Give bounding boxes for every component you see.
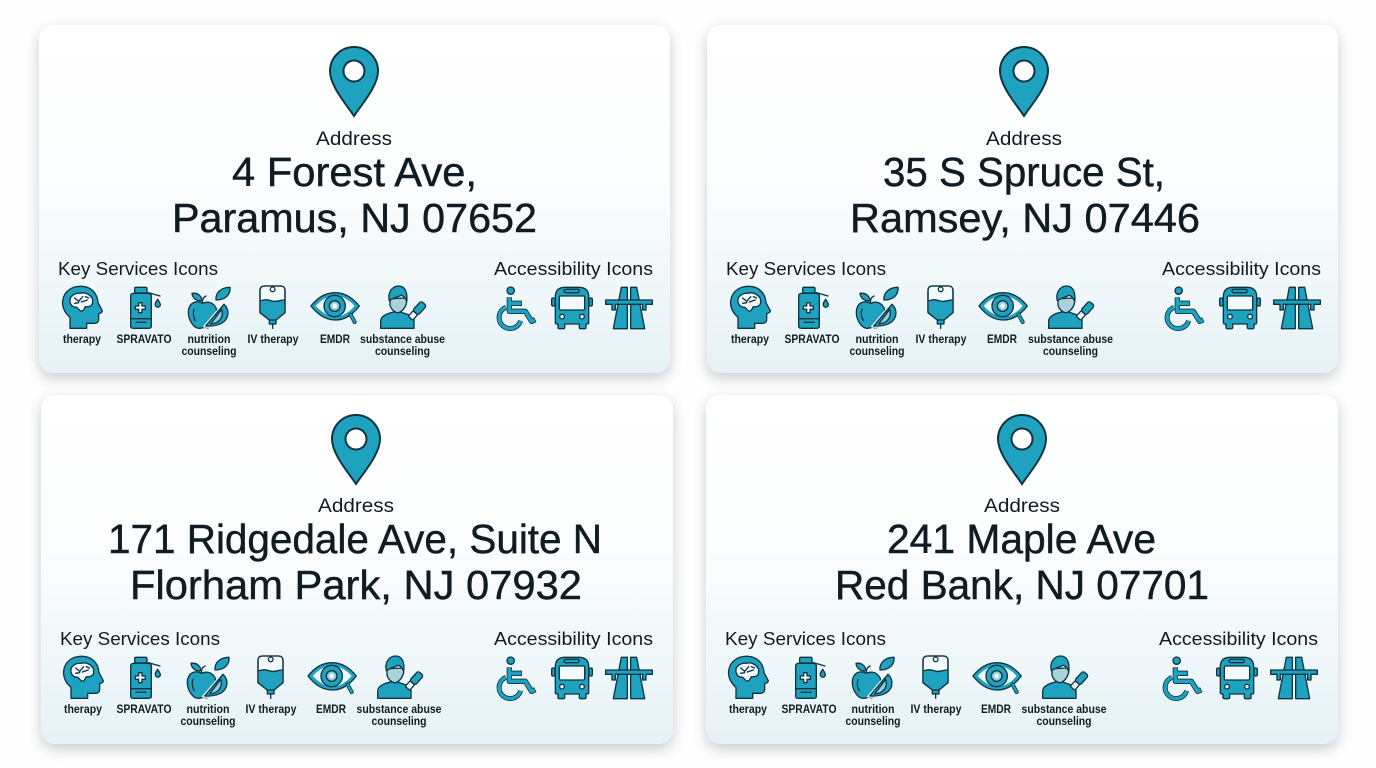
icon: location pin <box>1000 47 1048 116</box>
label: address: Address <box>984 496 1060 517</box>
service: SPRAVATO <box>116 657 172 716</box>
heading: address: 4 Forest Ave, <box>232 149 477 195</box>
service: therapy <box>731 286 770 346</box>
service: substance abuse counseling: counseling <box>1043 344 1098 358</box>
heading: key services: Key Services Icons <box>60 628 220 649</box>
service: SPRAVATO: SPRAVATO <box>116 702 172 716</box>
service: nutrition counseling: nutrition <box>186 702 230 716</box>
service: therapy: therapy <box>729 702 767 716</box>
icon: highway <box>1274 287 1320 329</box>
service: nutrition counseling: nutrition <box>188 332 230 346</box>
panel: Florham Park location <box>41 395 673 744</box>
service: nutrition counseling <box>182 287 236 358</box>
service: nutrition counseling <box>846 657 900 728</box>
icon: wheelchair <box>1165 657 1201 699</box>
icon: location pin <box>332 415 380 484</box>
service: IV therapy <box>910 656 962 716</box>
icon: highway <box>606 287 652 329</box>
service: IV therapy: IV therapy <box>916 332 967 346</box>
service: therapy: therapy <box>63 332 101 346</box>
service: EMDR <box>979 293 1027 346</box>
service: substance abuse counseling: counseling <box>375 344 430 358</box>
service: EMDR: EMDR <box>981 702 1011 716</box>
service: SPRAVATO <box>116 287 172 346</box>
service: substance abuse counseling: substance abuse <box>356 702 442 716</box>
icon: highway <box>606 657 652 699</box>
service: nutrition counseling <box>850 287 904 358</box>
panel: Paramus location <box>39 25 670 373</box>
service: substance abuse counseling: counseling <box>372 714 426 728</box>
heading: address: 35 S Spruce St, <box>883 149 1165 195</box>
heading: address: Red Bank, NJ 07701 <box>835 562 1209 608</box>
service: IV therapy <box>246 656 297 716</box>
heading: address: Ramsey, NJ 07446 <box>850 195 1200 241</box>
icon: location pin <box>330 47 378 116</box>
service: substance abuse counseling: substance abuse <box>360 332 445 346</box>
heading: address <box>172 149 537 241</box>
service: nutrition counseling: counseling <box>180 714 236 728</box>
service: substance abuse counseling: substance abuse <box>1028 332 1113 346</box>
heading: key services: Key Services Icons <box>58 258 218 279</box>
service: SPRAVATO: SPRAVATO <box>116 332 172 346</box>
heading: address <box>850 149 1200 241</box>
service: EMDR: EMDR <box>320 332 350 346</box>
icon: bus <box>552 657 592 699</box>
icon: bus <box>1217 657 1257 699</box>
heading: address: Florham Park, NJ 07932 <box>130 562 582 608</box>
icon: location pin <box>998 415 1046 484</box>
service: IV therapy <box>916 286 967 346</box>
service: nutrition counseling: counseling <box>182 344 236 358</box>
icon: wheelchair <box>499 657 535 699</box>
service: EMDR <box>311 293 359 346</box>
label: address: Address <box>316 129 392 150</box>
heading: address: Paramus, NJ 07652 <box>172 195 537 241</box>
icon: wheelchair <box>1167 287 1203 329</box>
service: IV therapy: IV therapy <box>246 702 297 716</box>
heading: accessibility: Accessibility Icons <box>1159 628 1318 649</box>
service: substance abuse counseling <box>1022 656 1107 728</box>
service: substance abuse counseling <box>1028 286 1113 358</box>
service: therapy <box>64 656 103 716</box>
service: substance abuse counseling: counseling <box>1036 714 1092 728</box>
heading: address <box>108 516 602 608</box>
panel: Red Bank location <box>706 395 1338 744</box>
panel: Ramsey location <box>707 25 1338 373</box>
service: nutrition counseling: nutrition <box>856 332 898 346</box>
service: therapy <box>63 286 102 346</box>
service: EMDR: EMDR <box>987 332 1017 346</box>
service: substance abuse counseling <box>356 656 442 728</box>
service: EMDR: EMDR <box>316 702 346 716</box>
service: substance abuse counseling: substance abuse <box>1022 702 1107 716</box>
icon: bus <box>552 287 592 329</box>
service: SPRAVATO: SPRAVATO <box>782 702 836 716</box>
service: nutrition counseling: counseling <box>846 714 900 728</box>
service: EMDR <box>308 663 356 716</box>
service: SPRAVATO: SPRAVATO <box>784 332 840 346</box>
service: IV therapy: IV therapy <box>910 702 962 716</box>
service: SPRAVATO <box>784 287 840 346</box>
service: EMDR <box>973 663 1021 716</box>
heading: address: 171 Ridgedale Ave, Suite N <box>108 516 602 562</box>
label: address: Address <box>318 496 394 517</box>
label: address: Address <box>986 129 1062 150</box>
heading: accessibility: Accessibility Icons <box>494 258 653 279</box>
service: therapy: therapy <box>731 332 769 346</box>
service: nutrition counseling: nutrition <box>852 702 894 716</box>
heading: key services: Key Services Icons <box>726 258 886 279</box>
heading: accessibility: Accessibility Icons <box>1162 258 1321 279</box>
heading: address <box>835 516 1209 608</box>
service: therapy <box>729 656 768 716</box>
service: substance abuse counseling <box>360 286 445 358</box>
service: SPRAVATO <box>782 657 836 716</box>
service: nutrition counseling <box>180 657 236 728</box>
service: therapy: therapy <box>64 702 102 716</box>
service: IV therapy <box>248 286 299 346</box>
heading: address: 241 Maple Ave <box>887 516 1156 562</box>
heading: accessibility: Accessibility Icons <box>494 628 653 649</box>
service: nutrition counseling: counseling <box>850 344 904 358</box>
heading: key services: Key Services Icons <box>725 628 886 649</box>
service: IV therapy: IV therapy <box>248 332 299 346</box>
icon: highway <box>1271 657 1317 699</box>
icon: wheelchair <box>499 287 535 329</box>
icon: bus <box>1220 287 1260 329</box>
